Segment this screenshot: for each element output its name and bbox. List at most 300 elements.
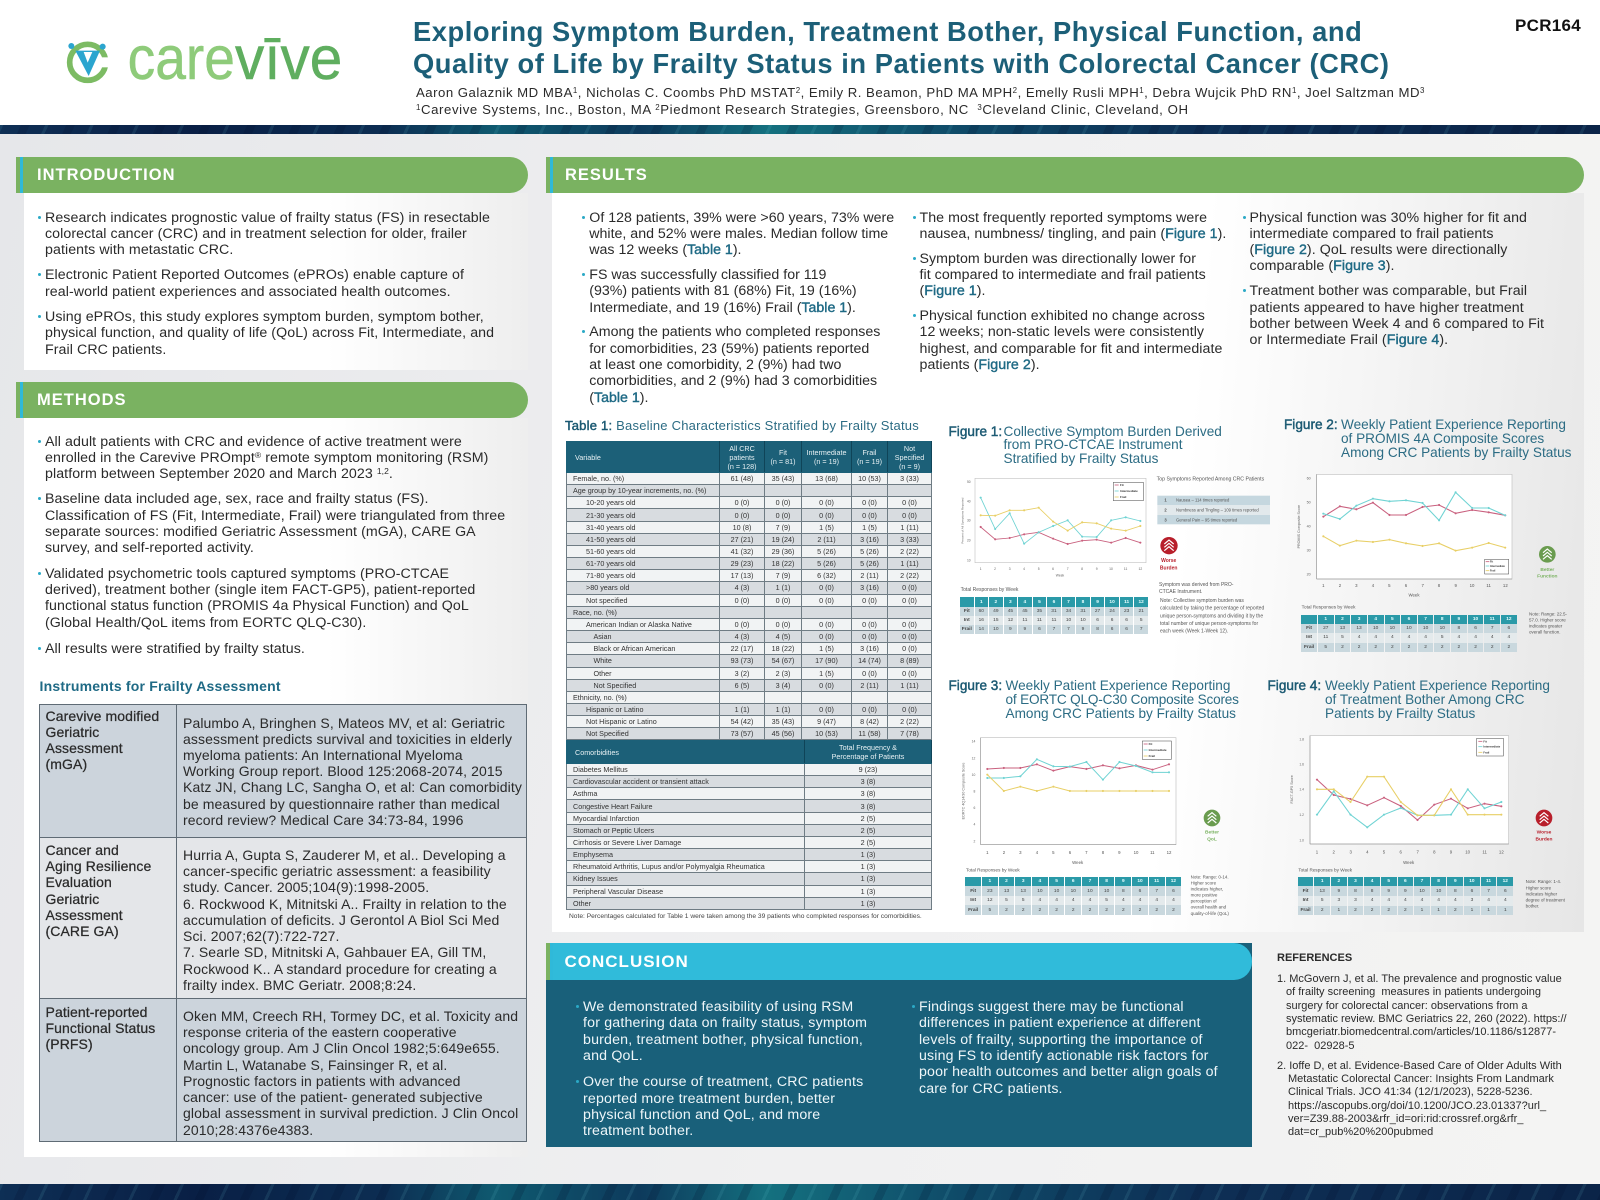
table: comorbidities: Total Frequency &	[839, 743, 897, 752]
figure 4 chart and notes: 6	[1399, 849, 1402, 854]
figure 4 table: total responses: Frail	[1300, 908, 1311, 913]
figure 1 table: total responses: 10	[1066, 618, 1071, 623]
figure 1 chart and notes: 1	[980, 567, 982, 571]
figure 4 table: total responses: 4	[1387, 898, 1390, 903]
table 1: baseline characteristics: Other	[594, 669, 611, 678]
text: introduction bullets: real-world patient experiences and associated health outcomes.	[45, 284, 451, 300]
figure 1 chart and notes: 8	[1081, 567, 1083, 571]
figure 1 table: total responses	[960, 597, 1148, 634]
row: CARE GA: Assessment	[46, 907, 123, 923]
text: results column 3: bother between Week 4 and 6 compared to Fit	[1250, 316, 1544, 332]
figure 2 table: total responses: 2	[1474, 645, 1477, 650]
reference 2: Metastatic Colorectal Cancer: Insights From Landmark	[1288, 1073, 1554, 1085]
reference 2: https://ascopubs.org/doi/10.1200/JCO.23.01337?url_	[1288, 1100, 1546, 1112]
text: results column 1: Of 128 patients, 39% were >60 years, 73% were	[589, 210, 894, 226]
figure 1 table: total responses: 16	[979, 618, 984, 623]
table 1: baseline characteristics: 54 (42)	[731, 717, 753, 726]
row: mGA: record review? Medical Care 34:73-84, 1996	[183, 812, 463, 828]
table 1: baseline characteristics: Not specified	[586, 596, 628, 605]
logo: Carevive: care	[128, 23, 235, 92]
text: results column 1: white, and 52% were males. Median follow time	[589, 226, 888, 242]
figure 4 chart and notes: indicates higher	[1526, 891, 1558, 896]
title: Quality of Life by Frailty Status in Patients with Colorectal Cancer (CRC)	[413, 48, 1390, 78]
bottom decorative band	[0, 1184, 1600, 1200]
text: results column 2: (Figure 1).	[920, 283, 986, 299]
figure 1 chart and notes: Week	[1056, 574, 1065, 578]
figure 4 chart and notes: Higher score	[1526, 885, 1552, 890]
figure 1 chart and notes: Symptom was derived from PRO-	[1159, 582, 1234, 588]
figure 1 chart and notes: 10	[1109, 567, 1113, 571]
figure 2 chart and notes: 57.0. Higher score	[1529, 618, 1566, 623]
text: introduction bullets: Using ePROs, this study explores symptom burden, symptom bother,	[45, 309, 484, 325]
figure 3 chart and notes: 4	[973, 823, 975, 827]
table: comorbidities: 3 (8)	[861, 789, 875, 798]
figure 1 table: total responses: 6	[1111, 627, 1113, 632]
table 1: baseline characteristics: 4 (5)	[776, 632, 790, 641]
table 1: baseline characteristics: 0 (0)	[862, 705, 877, 714]
figure 2 chart and notes: 3	[1355, 583, 1358, 588]
figure 3 table: total responses: 3	[1022, 879, 1025, 884]
figure 2 chart and notes: Note: Range: 22.5-	[1529, 611, 1568, 616]
text: results column 3: comparable (Figure 3).	[1250, 258, 1395, 274]
table 1: baseline characteristics: 10 (53)	[858, 474, 881, 483]
figure 4 table: total responses: 10	[1436, 889, 1441, 894]
table 1: baseline characteristics: 3 (16)	[860, 535, 879, 544]
table: comorbidities: Percentage of Patients	[832, 752, 904, 761]
table 1: baseline characteristics: 3 (2)	[735, 669, 749, 678]
figure 2 chart and notes: 8	[1438, 583, 1441, 588]
figure 2 table: total responses: 2	[1341, 645, 1344, 650]
figure 4 table: total responses: 2	[1354, 908, 1357, 913]
row: CARE GA: Aging Resilience	[46, 858, 151, 874]
figure 4 table: total responses: 1	[1487, 908, 1490, 913]
figure 4 chart and notes: 1.4	[1299, 788, 1304, 792]
figure 3 table: total responses: 10	[1104, 889, 1109, 894]
figure 1 chart and notes: 12	[1138, 567, 1142, 571]
figure 1 table: total responses: 11	[1037, 618, 1042, 623]
table 1: baseline characteristics: 41-50 years old	[586, 535, 636, 544]
figure 1 table: total responses: 6	[1111, 618, 1113, 623]
table 1: baseline characteristics: Asian	[594, 632, 611, 641]
text: introduction bullets: colorectal cancer (CRC) and in treatment selection for older, frailer	[45, 226, 467, 242]
figure 1 chart and notes: 50	[967, 480, 971, 484]
figure 4 chart and notes: bother.	[1526, 904, 1539, 909]
figure 1	[948, 424, 1270, 635]
table 1: baseline characteristics: 0 (0)	[902, 583, 917, 592]
figure 1 chart and notes: unique person-symptoms and dividing it by the	[1160, 613, 1263, 619]
figure 3 chart and notes: 10	[1134, 850, 1139, 855]
figure 3 table: total responses: 10	[1037, 889, 1043, 894]
row: PRFS: oncology group. Am J Clin Oncol 1982;5:649e655.	[183, 1040, 500, 1056]
row: CARE GA: Rockwood K.. A standard procedure for creating a	[183, 961, 497, 977]
figure 1 table: total responses: 7	[1140, 627, 1143, 632]
figure 1 table: total responses: 6	[1038, 627, 1041, 632]
table 1: baseline characteristics: 0 (0)	[902, 596, 917, 605]
row: PRFS: Prognostic factors in patients with advanced	[183, 1073, 461, 1089]
table 1: baseline characteristics: 71-80 years old	[586, 571, 636, 580]
figure 3 table: total responses: 2	[1105, 908, 1108, 913]
figure 1 title	[948, 424, 1222, 466]
figure 3 chart and notes: 7	[1085, 850, 1088, 855]
figure 1 table: total responses: 15	[993, 618, 998, 623]
row: mGA: be measured by questionnaire rather than medical	[183, 796, 500, 812]
figure 3 table: total responses: 2	[1039, 908, 1041, 913]
figure 3	[948, 678, 1239, 916]
figure 4 table: total responses: 1	[1421, 908, 1423, 913]
text: methods bullets: platform between September 2020 and March 2023 1,2.	[45, 466, 393, 482]
figure 3 table: total responses: 4	[1155, 898, 1158, 903]
figure 2 table: total responses: 27	[1323, 626, 1328, 631]
text: conclusion column 1	[576, 999, 867, 1139]
text: methods bullets: derived), treatment bother (single item FACT-GP5), patient-reported	[45, 582, 475, 598]
figure 1 table: total responses: Int	[964, 618, 970, 623]
figure 1 table: total responses: 45	[1008, 609, 1013, 614]
text: results column 2: Symptom burden was directionally lower for	[920, 251, 1196, 267]
figure 4 chart and notes: 5	[1383, 849, 1386, 854]
text: conclusion column 1: for gathering data on frailty status, symptom	[583, 1015, 867, 1031]
figure 2 chart and notes: 60	[1307, 477, 1311, 481]
figure 1 table: total responses: 10	[993, 627, 998, 632]
figure 2 chart and notes: indicates greater	[1529, 624, 1563, 629]
figure 1 table: total responses: 60	[979, 609, 984, 614]
figure 4 chart and notes: Note: Range: 1-4.	[1526, 879, 1561, 884]
figure 2 table: total responses: 2	[1508, 645, 1510, 650]
figure 3 table: total responses: 2	[1005, 908, 1008, 913]
table 1: baseline characteristics: Ethnicity, no. (%)	[573, 693, 627, 702]
text: introduction bullets: patients with metastatic CRC.	[45, 242, 233, 258]
reference 1: systematic review. BMC Geriatrics 22, 260 (2022). https://	[1286, 1013, 1567, 1025]
figure 1 table: total responses: 14	[979, 627, 984, 632]
figure 2 chart and notes: overall function.	[1529, 630, 1561, 635]
figure 2 chart and notes: 10	[1470, 583, 1475, 588]
figure 4 table: total responses: 12	[1503, 879, 1508, 884]
text: introduction bullets: physical function, and quality of life (QoL) across Fit, Intermediate, and	[45, 325, 494, 341]
table 1: baseline characteristics: White	[594, 656, 612, 665]
table 1: baseline characteristics: 8 (89)	[900, 656, 919, 665]
table 1: baseline characteristics: All CRC	[729, 444, 755, 452]
figure 2 table: total responses: 2	[1374, 645, 1377, 650]
table 1: baseline characteristics: 5 (26)	[817, 547, 836, 556]
figure 2 table: total responses: 2	[1358, 645, 1360, 650]
figure 3 chart and notes: Higher score	[1191, 880, 1217, 885]
table 1: baseline characteristics: 18 (22)	[772, 559, 794, 568]
table 1 title: Table 1: Baseline Characteristics Stratified by Frailty Status	[565, 418, 919, 433]
text: conclusion column 2: Findings suggest there may be functional	[919, 999, 1184, 1015]
row: mGA: Working Group report. Blood 125:2068-2074, 2015	[183, 763, 503, 779]
text: results column 1: was 12 weeks (Table 1).	[589, 242, 742, 258]
top decorative band	[0, 125, 1600, 134]
figure 2 table: total responses: 2	[1391, 645, 1394, 650]
heading accent stripe	[546, 943, 550, 980]
row: CARE GA: accumulation of deficits. J Gerontol A Biol Sci Med	[183, 912, 499, 928]
references heading: REFERENCES	[1277, 952, 1352, 964]
text: conclusion column 1: treatment bother.	[583, 1123, 693, 1139]
figure 1 table: total responses: 8	[1082, 600, 1084, 605]
heading: conclusion	[546, 943, 1252, 980]
figure 2 title: Among CRC Patients by Frailty Status	[1341, 445, 1571, 460]
table 1: baseline characteristics: 2 (22)	[900, 717, 919, 726]
figure 4 chart and notes: 1.8	[1299, 737, 1304, 741]
figure 2 title: Figure 2:	[1284, 416, 1338, 432]
text: results column 2: Physical function exhibited no change across	[920, 308, 1205, 324]
table 1: baseline characteristics: 61-70 years old	[586, 559, 636, 568]
figure 3 table: total responses	[965, 877, 1181, 915]
text: conclusion column 1: burden, treatment bother, physical function,	[583, 1032, 863, 1048]
table 1: baseline characteristics: 0 (0)	[735, 596, 749, 605]
text: results column 3: Treatment bother was comparable, but Frail	[1250, 283, 1527, 299]
text: methods bullets: separate sources: modified Geriatric Assessment (mGA), CARE GA	[45, 524, 476, 540]
table 1: baseline characteristics: 13 (68)	[815, 474, 838, 483]
figure 2 table: total responses: 2	[1424, 645, 1427, 650]
figure 4 table: total responses: 3	[1471, 898, 1473, 903]
row: PRFS: 2010;28:4376e4383.	[183, 1122, 313, 1138]
row: PRFS: (PRFS)	[46, 1036, 93, 1052]
table 1: baseline characteristics: 1 (1)	[776, 583, 790, 592]
table: comorbidities: 1 (3)	[861, 899, 875, 908]
row: mGA: Palumbo A, Bringhen S, Mateos MV, et al: Geriatric	[183, 714, 505, 730]
figure 2 chart and notes: 30	[1307, 548, 1311, 552]
text: results column 3: patients appeared to have higher treatment	[1250, 300, 1524, 316]
figure 3 table: total responses: 5	[1022, 898, 1025, 903]
row: CARE GA: (CARE GA)	[46, 923, 119, 939]
figure 4 chart and notes: Worse	[1537, 830, 1552, 836]
table 1: baseline characteristics: 27 (21)	[731, 535, 753, 544]
table 1: baseline characteristics: 0 (0)	[819, 498, 834, 507]
figure 3 table: total responses: 6	[1072, 879, 1075, 884]
figure 4 table: total responses: 4	[1454, 898, 1457, 903]
figure 2 table: total responses: 4	[1458, 635, 1460, 640]
table: comorbidities: 1 (3)	[861, 850, 875, 859]
table 1: baseline characteristics: 31-40 years old	[586, 523, 636, 532]
figure 4 title: of Treatment Bother Among CRC	[1325, 692, 1524, 707]
table 1: baseline characteristics: 19 (24)	[772, 535, 794, 544]
table 1: baseline characteristics: 10-20 years old	[586, 498, 636, 507]
figure 1 table: total responses: 8	[1096, 627, 1099, 632]
table 1: baseline characteristics: (n = 81)	[770, 457, 795, 466]
figure 3 chart and notes: Frail	[1149, 754, 1155, 758]
figure 2 table: total responses: 13	[1340, 626, 1345, 631]
reference 2: 2. Ioffe D, et al. Evidence-Based Care of Older Adults With	[1277, 1060, 1562, 1072]
figure 1 chart and notes: 9	[1096, 567, 1098, 571]
figure 3 title: of EORTC QLQ-C30 Composite Scores	[1006, 692, 1239, 707]
text: results column 1: for comorbidities, 23 (59%) patients reported	[589, 341, 869, 357]
heading: methods: METHODS	[37, 390, 126, 408]
figure 1 title: Collective Symptom Burden Derived	[1004, 424, 1222, 438]
figure 1 table: total responses: 31	[1051, 609, 1057, 614]
figure 1 table: total responses: 6	[1125, 618, 1128, 623]
table: comorbidities: Comorbidities	[575, 748, 619, 756]
figure 2 title: Weekly Patient Experience Reporting	[1341, 416, 1566, 432]
figure 2 table: total responses: 2	[1441, 645, 1444, 650]
figure 1 chart and notes: 7	[1067, 567, 1069, 571]
table 1: baseline characteristics: 0 (0)	[776, 620, 790, 629]
text: results column 2: 12 weeks; non-static levels were consistently	[920, 324, 1204, 340]
figure 2 table: total responses: 12	[1506, 617, 1512, 622]
figure 2 table: total responses: Int	[1306, 635, 1312, 640]
table 1: baseline characteristics: (n = 128)	[728, 462, 756, 470]
table: comorbidities: 3 (8)	[861, 777, 875, 786]
table 1: baseline characteristics: Black or African American	[594, 644, 675, 653]
text: results column 2: patients (Figure 2).	[920, 357, 1040, 373]
row: PRFS: Functional Status	[46, 1020, 155, 1036]
figure 3 chart and notes: overall health and	[1191, 905, 1227, 910]
figure 4 chart and notes: 7	[1416, 849, 1419, 854]
figure 3 chart and notes: EORTC 4Q14/30 Composite Score	[961, 763, 965, 819]
figure 2 chart and notes: Function	[1537, 574, 1558, 580]
figure 4 chart and notes: 1	[1316, 849, 1319, 854]
figure 1 chart and notes: Percent of All Symptoms Reported	[960, 497, 964, 544]
figure 1 chart and notes: calculated by taking the percentage of reported	[1160, 606, 1264, 612]
table: comorbidities: Myocardial Infarction	[573, 814, 639, 823]
figure 3 chart and notes: 12	[1167, 850, 1172, 855]
figure 1 table: total responses: 9	[1096, 600, 1099, 605]
figure 3 table: total responses: 11	[1154, 879, 1159, 884]
figure 4 table: total responses: 4	[1504, 898, 1507, 903]
figure 1 table: total responses: 34	[1066, 609, 1071, 614]
figure 1 chart and notes: Nausea – 114 times reported	[1176, 497, 1230, 502]
reference 2: Clinical Trials. JCO 41:34 (12/1/2023), 5228-5236.	[1288, 1086, 1533, 1098]
table 1: baseline characteristics: 2 (3)	[776, 669, 790, 678]
text: conclusion column 2	[912, 999, 1218, 1097]
title	[413, 16, 1390, 79]
table 1: baseline characteristics: 18 (22)	[772, 644, 794, 653]
text: conclusion column 1: Over the course of treatment, CRC patients	[583, 1074, 863, 1090]
figure 2 chart and notes: Week	[1408, 593, 1420, 598]
figure 4 chart and notes: Frail	[1483, 750, 1490, 754]
figure 1 chart and notes: 40	[967, 499, 971, 503]
figure 2 table: total responses: 5	[1391, 617, 1394, 622]
figure 3 chart and notes: 8	[973, 789, 975, 793]
figure 1 chart and notes: 1	[1164, 497, 1167, 502]
row: mGA: Katz JN, Chang LC, Sangha O, et al: Can comorbidity	[183, 779, 522, 795]
figure 2 chart and notes: 40	[1307, 524, 1311, 528]
heading: results	[546, 157, 1584, 193]
table 1: baseline characteristics: 21-30 years old	[586, 511, 636, 520]
table 1: baseline characteristics: 11 (58)	[858, 729, 881, 738]
text: conclusion column 2: using FS to identify actionable risk factors for	[919, 1048, 1209, 1064]
table 1: baseline characteristics: 8 (42)	[860, 717, 879, 726]
reference 2	[1277, 1060, 1562, 1138]
text: results column 3: Physical function was 30% higher for fit and	[1250, 210, 1527, 226]
figure 2 table: total responses: 10	[1390, 626, 1395, 631]
figure 3 table: total responses: 5	[1055, 879, 1058, 884]
figure 2 table: total responses: 10	[1373, 626, 1378, 631]
references	[1277, 952, 1567, 1138]
figure 2 chart and notes: Frail	[1490, 570, 1496, 573]
table: instruments for frailty assessment	[39, 704, 527, 1142]
figure 4 table: total responses: 1	[1437, 908, 1440, 913]
table 1: baseline characteristics: 4 (3)	[735, 632, 749, 641]
figure 1 chart and notes	[960, 476, 1270, 635]
text: results column 3: (Figure 2). QoL results were directionally	[1250, 242, 1507, 258]
figure 4 table: total responses: 9	[1337, 889, 1340, 894]
figure 2 table: total responses: Fit	[1306, 626, 1312, 631]
table 1: baseline characteristics: 1 (11)	[900, 681, 919, 690]
figure 1 chart and notes: 6	[1052, 567, 1054, 571]
figure 2 chart and notes: 11	[1486, 583, 1492, 588]
table: comorbidities: Stomach or Peptic Ulcers	[573, 826, 654, 835]
figure 4 table: total responses: 9	[1404, 889, 1407, 894]
table: comorbidities: Emphysema	[573, 850, 613, 859]
figure 4 title: Figure 4:	[1268, 678, 1321, 693]
figure 2 table: total responses: 4	[1391, 635, 1394, 640]
figure 4 table: total responses: 9	[1387, 889, 1390, 894]
text: results column 2: highest, and comparable for fit and intermediate	[920, 341, 1222, 357]
figure 1 table: total responses: 3	[1009, 600, 1012, 605]
table: comorbidities: 3 (8)	[861, 802, 875, 811]
figure 3 table: total responses: 2	[1089, 908, 1091, 913]
figure 1 table: total responses: 10	[1080, 618, 1086, 623]
figure 1 table: total responses: 31	[1080, 609, 1086, 614]
figure 3 table: total responses: 2	[1139, 908, 1141, 913]
figure 1 table: total responses: 9	[1082, 627, 1084, 632]
figure 2 table: total responses: 10	[1473, 617, 1478, 622]
figure 3 chart and notes: Week	[1072, 860, 1084, 865]
figure 3 table: total responses: 13	[1004, 889, 1009, 894]
table 1: baseline characteristics: 2 (11)	[817, 535, 836, 544]
row: CARE GA: 7. Searle SD, Mitnitski A, Gahbauer EA, Gill TM,	[183, 944, 486, 960]
figure 3 table: total responses: 4	[1089, 898, 1091, 903]
table 1: baseline characteristics: 17 (13)	[731, 571, 753, 580]
table 1: baseline characteristics: 35 (43)	[772, 474, 794, 483]
figure 1 chart and notes: CTCAE Instrument.	[1159, 589, 1202, 595]
text: results column 1: comorbidities, and 2 (9%) had 3 comorbidities	[589, 373, 877, 389]
row: mGA: Assessment	[46, 740, 123, 756]
table 1: baseline characteristics: 0 (0)	[776, 498, 790, 507]
figure 2 table: total responses: 10	[1423, 626, 1428, 631]
figure 4 chart and notes: 1.6	[1299, 763, 1304, 767]
figure 3 table: total responses: Fit	[970, 889, 976, 894]
text: conclusion column 2: care for CRC patients.	[919, 1081, 1063, 1097]
table 1: baseline characteristics: 2 (22)	[900, 571, 919, 580]
figure 2 table: total responses: 11	[1323, 635, 1328, 640]
figure 1 table: total responses: 11	[1124, 600, 1129, 605]
table 1: baseline characteristics: 0 (0)	[819, 620, 834, 629]
figure 3 chart and notes	[961, 737, 1229, 916]
poster number: PCR164	[1515, 16, 1581, 35]
figure 4 chart and notes: 11	[1482, 849, 1488, 854]
figure 1 chart and notes: 2	[1164, 507, 1167, 512]
table 1: baseline characteristics: 3 (16)	[860, 644, 879, 653]
text: results column 2: The most frequently reported symptoms were	[920, 210, 1207, 226]
figure 3 table: total responses: 4	[1039, 898, 1041, 903]
figure 3 table: total responses: 2	[1172, 908, 1175, 913]
row: PRFS: Patient-reported	[46, 1004, 148, 1020]
row: mGA: myeloma patients: An International Myeloma	[183, 747, 463, 763]
figure 4 chart and notes: Total Responses by Week	[1298, 868, 1353, 873]
figure 4 table: total responses: 4	[1487, 898, 1490, 903]
text: methods bullets: (Global Health/QoL items from EORTC QLQ-C30).	[45, 615, 366, 631]
figure 1 table: total responses: 24	[1109, 609, 1115, 614]
table: comorbidities: Congestive Heart Failure	[573, 802, 652, 811]
table 1: baseline characteristics: 4 (3)	[735, 583, 749, 592]
figure 4 table: total responses: 1	[1504, 908, 1507, 913]
table 1: baseline characteristics: Female, no. (%)	[573, 474, 624, 483]
figure 1 table: total responses: 35	[1037, 609, 1042, 614]
figure 3 chart and notes: quality-of-life (QoL)	[1191, 911, 1229, 916]
text: conclusion column 2: levels of frailty, supporting the importance of	[919, 1032, 1203, 1048]
figure 3 chart and notes: 5	[1052, 850, 1055, 855]
figure 4 chart and notes: Fit	[1483, 739, 1487, 743]
figure 2 table: total responses: 7	[1424, 617, 1427, 622]
figure 2 chart and notes: 4	[1372, 583, 1375, 588]
table 1: baseline characteristics: 5 (26)	[817, 559, 836, 568]
figure 2 chart and notes: 12	[1503, 583, 1508, 588]
heading: introduction	[16, 157, 528, 193]
text: results column 1: (Table 1).	[589, 390, 648, 406]
text: introduction bullets: Research indicates prognostic value of frailty status (FS) in resectable	[45, 210, 490, 226]
figure 4 table: total responses: 2	[1387, 908, 1390, 913]
